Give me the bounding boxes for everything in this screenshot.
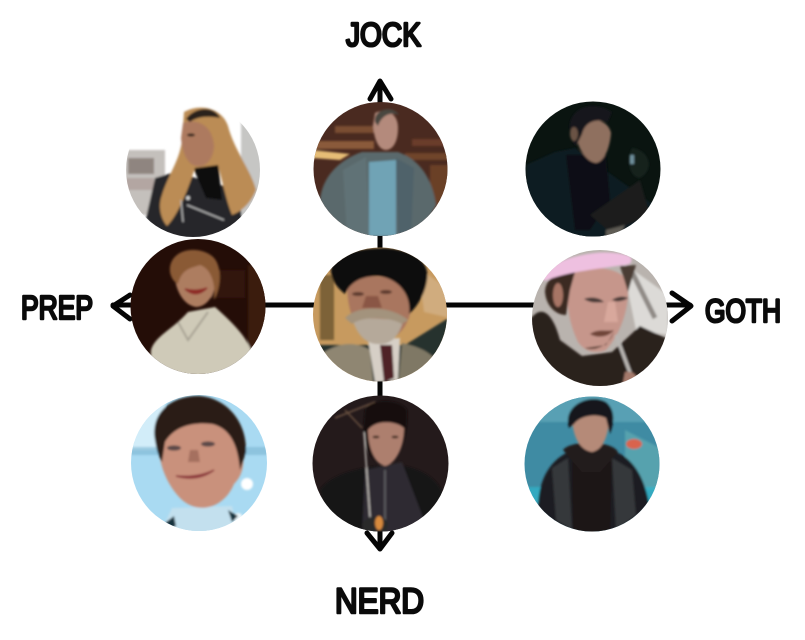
label: PREP: PREP (21, 289, 93, 326)
label: NERD: NERD (335, 582, 424, 621)
portrait: woman in black with umbrella, nerd (310, 392, 452, 535)
portrait: woman with crimped blonde hair, prep-jock (126, 106, 260, 237)
compass axes and arrows (113, 81, 691, 549)
portrait: old man with black hat and moustache, center (313, 248, 447, 382)
portrait: smiling woman in white blouse, prep (130, 239, 266, 374)
portrait: man in leather jacket and hoodie, goth-nerd (524, 396, 660, 532)
label: JOCK: JOCK (346, 16, 421, 53)
portrait: dark-clothed man, goth-jock (526, 102, 660, 236)
portrait: man in grey coat, jock (310, 100, 450, 240)
label: GOTH: GOTH (705, 293, 781, 329)
portrait: smiling boy with dark hair, prep-nerd (131, 395, 267, 531)
portrait: man with pink shower cap and smoking pipe, goth (532, 250, 668, 386)
